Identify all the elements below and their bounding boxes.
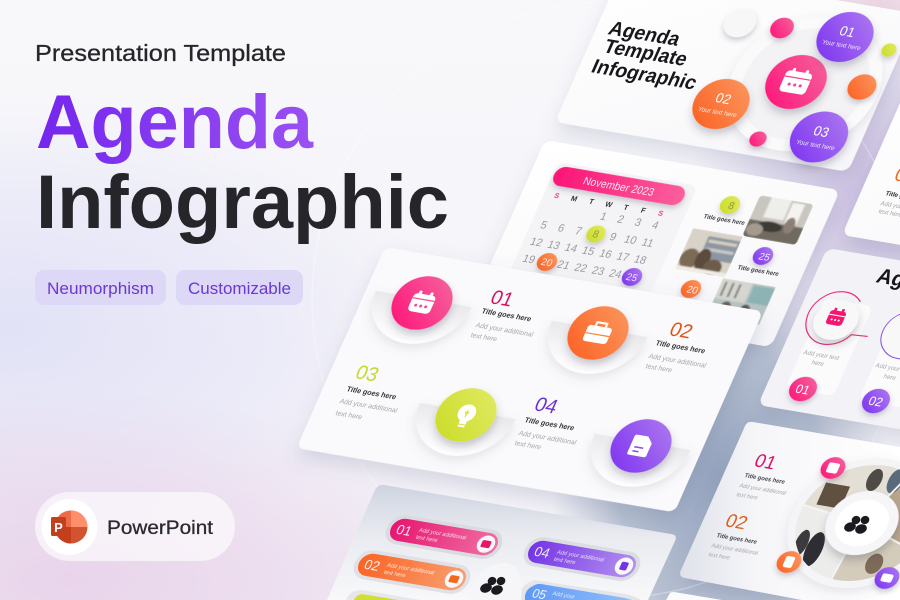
calendar grid: F bbox=[639, 206, 648, 215]
item 03: 03 bbox=[352, 362, 382, 386]
slide card: bottom right sliver bbox=[666, 592, 722, 600]
item 02 bbox=[532, 299, 708, 381]
calendar grid: 22 bbox=[572, 262, 589, 275]
pill 04 bbox=[519, 535, 645, 583]
pill 04: 04 bbox=[532, 544, 553, 561]
pill 01 bbox=[381, 513, 507, 561]
cover title: Agenda bbox=[605, 18, 685, 51]
slide card: far right partial bbox=[842, 78, 900, 285]
slide card: gradient pills bbox=[327, 485, 676, 600]
date badge 8: 8 bbox=[590, 228, 601, 241]
calendar grid: 1 bbox=[598, 211, 609, 223]
pill 01: 01 bbox=[394, 522, 414, 539]
photo tile: 8: 8 bbox=[726, 200, 737, 212]
photo tile: 20: 20 bbox=[684, 285, 700, 297]
tag: Customizable bbox=[176, 270, 303, 305]
purple bowl and document disc bbox=[575, 412, 701, 494]
calendar grid: 21 bbox=[555, 259, 572, 272]
date badge 20 bbox=[534, 252, 560, 272]
pill 02: Add your additional bbox=[386, 563, 435, 576]
date badge 25: 25 bbox=[624, 272, 639, 284]
text block 01: Title goes here bbox=[743, 473, 786, 486]
date badge 20: 20 bbox=[539, 257, 554, 269]
calendar header: November 2023 bbox=[581, 176, 656, 199]
tag: Neumorphism: Neumorphism bbox=[47, 279, 154, 298]
bubble 01: Your text here bbox=[821, 39, 862, 52]
item 02: Add your additional bbox=[647, 353, 708, 370]
calendar grid: 23 bbox=[590, 265, 606, 278]
slide card: agenda template cover bbox=[555, 0, 900, 172]
circle: tiny pink bbox=[747, 130, 769, 148]
pill 05 bbox=[520, 580, 641, 600]
bubble 03 bbox=[781, 107, 857, 167]
step badge 01: 01 bbox=[793, 382, 812, 397]
item 03: Add your additional bbox=[338, 398, 399, 415]
ring badge orange bbox=[773, 549, 805, 575]
item 03 bbox=[334, 362, 526, 463]
pill 03 bbox=[346, 590, 420, 600]
pink bowl and calendar disc bbox=[356, 269, 482, 351]
item 04: Title goes here bbox=[523, 415, 576, 432]
calendar grid: 9 bbox=[607, 231, 618, 244]
orange bowl and briefcase disc bbox=[532, 299, 658, 381]
calendar grid: 11 bbox=[640, 237, 655, 250]
photo: whiteboard team bbox=[712, 278, 776, 325]
headline word: Infographic: Infographic bbox=[36, 160, 449, 245]
center team disc bbox=[470, 563, 522, 600]
item 01 bbox=[356, 269, 535, 351]
calendar grid: W bbox=[604, 200, 614, 209]
tag: Customizable: Customizable bbox=[188, 279, 291, 298]
calendar grid: T bbox=[588, 197, 596, 206]
calendar grid: S bbox=[553, 191, 561, 200]
photo tile: 20 bbox=[678, 279, 704, 299]
text block 02: Title goes here bbox=[715, 533, 758, 546]
PowerPoint badge: PowerPoint bbox=[107, 518, 214, 539]
calendar grid: 5 bbox=[538, 219, 549, 232]
kicker: Presentation Template: Presentation Template bbox=[35, 40, 286, 66]
cover title: Template bbox=[600, 36, 691, 71]
pill 02: text here bbox=[383, 570, 406, 579]
date badge 8 bbox=[583, 224, 609, 244]
calendar grid bbox=[520, 190, 668, 284]
calendar grid: 14 bbox=[562, 242, 579, 255]
calendar grid: 16 bbox=[597, 248, 614, 261]
photo tile: 8: Title goes here bbox=[702, 213, 746, 227]
calendar panel bbox=[496, 162, 698, 326]
circle: small lime bbox=[879, 42, 899, 58]
item 01: text here bbox=[469, 332, 498, 343]
icon: PowerPoint logo bbox=[51, 510, 88, 544]
calendar grid: 19 bbox=[520, 253, 537, 266]
bubble 03: Your text here bbox=[795, 139, 836, 152]
bubble 03: 03 bbox=[811, 123, 832, 140]
calendar grid: 3 bbox=[632, 217, 643, 229]
circle: medium orange bbox=[843, 72, 881, 102]
calendar grid: 15 bbox=[580, 245, 596, 258]
calendar grid: S bbox=[657, 209, 665, 218]
bubble 02: Your text here bbox=[697, 106, 738, 119]
icon: team bbox=[843, 514, 871, 535]
calendar grid: 18 bbox=[632, 254, 648, 267]
central calendar circle bbox=[756, 51, 836, 113]
main slide card: four agenda items bbox=[297, 247, 763, 512]
calendar grid: T bbox=[622, 203, 631, 212]
text block 02 bbox=[707, 511, 759, 561]
slide card: agenda ring steps bbox=[758, 248, 900, 455]
calendar grid: 6 bbox=[556, 222, 566, 235]
item 04: text here bbox=[513, 440, 542, 451]
calendar grid: 17 bbox=[614, 251, 631, 264]
item 03: text here bbox=[334, 410, 363, 421]
bubble 02: 02 bbox=[713, 90, 734, 107]
lime bowl and lightbulb disc bbox=[400, 381, 526, 463]
text block 02: Add your additional bbox=[710, 543, 759, 557]
headline word: Agenda: Agenda bbox=[36, 80, 314, 165]
photo tile: 25: Title goes here bbox=[736, 264, 780, 278]
photo tile: 8 bbox=[702, 195, 746, 227]
pill 04: Add your additional bbox=[556, 550, 605, 563]
pill 01: Add your additional bbox=[418, 528, 467, 541]
step badge 02: 02 bbox=[866, 394, 885, 409]
text block 01: 01 bbox=[751, 451, 780, 474]
item 02: Title goes here bbox=[654, 338, 707, 355]
pill 02: 02 bbox=[362, 557, 382, 574]
calendar grid: 13 bbox=[545, 239, 562, 252]
calendar grid: 7 bbox=[573, 225, 584, 238]
slide card: photo ring bbox=[680, 422, 900, 600]
item 04: 04 bbox=[531, 394, 561, 418]
neumorphic orbit ring bbox=[704, 6, 900, 162]
text block 02: text here bbox=[707, 552, 731, 561]
step column 02: here bbox=[882, 373, 898, 382]
text block 01: text here bbox=[735, 492, 759, 501]
calendar header bbox=[550, 165, 688, 207]
circle: white accent bbox=[719, 6, 761, 40]
step column 01 bbox=[785, 288, 884, 403]
calendar grid: M bbox=[569, 194, 579, 203]
item 01: Add your additional bbox=[474, 322, 535, 339]
step column 01: here bbox=[810, 359, 826, 368]
step column 02 bbox=[858, 307, 900, 415]
calendar grid: 2 bbox=[615, 214, 626, 226]
photo tile: 25: 25 bbox=[756, 252, 772, 264]
calendar grid: 24 bbox=[607, 268, 624, 281]
tag: Neumorphism bbox=[35, 270, 166, 305]
ring badge purple bbox=[871, 565, 900, 591]
pill 04: text here bbox=[553, 557, 576, 566]
calendar grid: 4 bbox=[650, 220, 661, 232]
step column 01: Add your text bbox=[802, 349, 841, 362]
icon: pink calendar bbox=[825, 307, 848, 326]
calendar grid: 10 bbox=[622, 234, 639, 247]
cover title: Infographic bbox=[588, 56, 700, 94]
item 04: Add your additional bbox=[517, 430, 578, 447]
item 02: text here bbox=[644, 363, 673, 374]
text block 01: Add your additional bbox=[738, 483, 787, 497]
item 04 bbox=[513, 394, 701, 494]
item 03: Title goes here bbox=[345, 384, 398, 401]
bubble 01 bbox=[808, 8, 882, 66]
calendar grid: 12 bbox=[528, 236, 545, 249]
PowerPoint badge bbox=[35, 492, 235, 561]
item 02: 02 bbox=[666, 319, 696, 343]
item 01: Title goes here bbox=[480, 306, 533, 323]
ring badge pink bbox=[817, 455, 849, 481]
text block 01 bbox=[735, 451, 787, 501]
text block 02: 02 bbox=[722, 511, 751, 534]
photo: meeting room bbox=[742, 195, 814, 245]
item 01: 01 bbox=[487, 287, 517, 311]
pill 01: text here bbox=[415, 535, 438, 544]
photo: team at bookshelf bbox=[675, 228, 743, 278]
icon: PowerPoint logo: P bbox=[54, 520, 63, 535]
circle: small pink bbox=[767, 16, 797, 40]
pill 02 bbox=[349, 548, 475, 596]
photo ring bbox=[785, 458, 900, 594]
slide card: calendar and photos bbox=[476, 140, 840, 347]
cover title bbox=[588, 18, 700, 94]
date badge 25 bbox=[619, 267, 645, 287]
bubble 01: 01 bbox=[837, 23, 858, 40]
photo tile: 25 bbox=[736, 246, 780, 278]
bubble 02 bbox=[684, 75, 758, 133]
